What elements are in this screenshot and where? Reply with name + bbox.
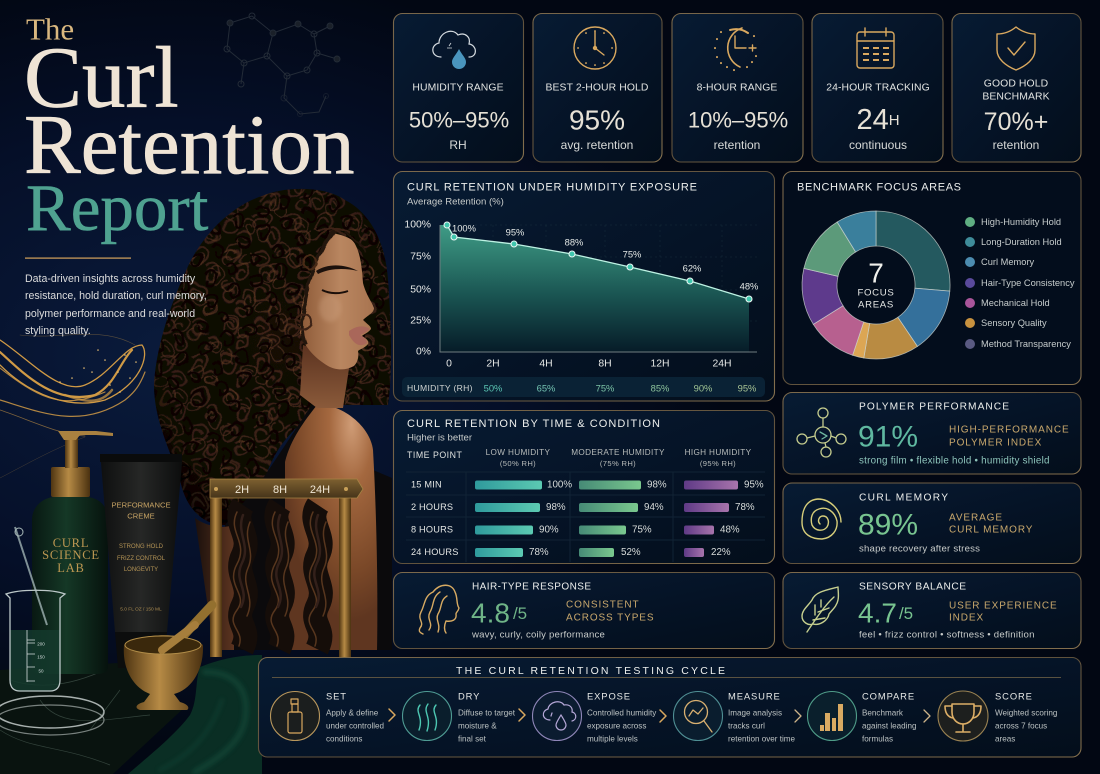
step: score: across 7 focus: [995, 722, 1047, 730]
pump bottle product: CURL: [53, 536, 89, 550]
hair swatch test rack: 8H: [273, 484, 287, 496]
shoulder and arm: [285, 405, 377, 650]
arrow: [660, 710, 666, 722]
row: 2 hours: 98%: [546, 502, 566, 513]
panel: polymer performance: HIGH-PERFORMANCE: [949, 424, 1070, 436]
face: [300, 233, 374, 369]
panel: humidity range: [394, 14, 524, 162]
intro text: polymer performance and real-world: [25, 308, 195, 320]
humidity strip: 65%: [537, 382, 555, 394]
panel: polymer performance: [783, 392, 1081, 474]
panel: retention by time and condition table: CURL RETENTION BY TIME & CONDITION: [407, 418, 660, 430]
y axis labels: 25%: [410, 316, 431, 326]
gold rule: [25, 258, 131, 259]
panel: sensory balance: INDEX: [949, 612, 984, 624]
step: set: Apply & define: [326, 708, 379, 718]
donut center label: [857, 258, 895, 310]
humidity strip: [402, 377, 765, 397]
y axis labels: [404, 220, 431, 358]
rack top bar: [210, 479, 363, 498]
row: 8 hours: 90%: [539, 524, 559, 536]
black tank top: [225, 403, 320, 650]
panel: hair-type response: 4.8/5: [471, 598, 527, 628]
icon: curly hair profile: [419, 585, 459, 634]
x axis labels: 4H: [539, 358, 553, 370]
hair swatch test rack: 24H: [310, 484, 330, 496]
table header: (95% RH): [700, 459, 736, 468]
panel: best 2-hour hold: avg. retention: [561, 138, 633, 152]
step: compare: COMPARE: [862, 690, 915, 702]
green satin cloth: [128, 655, 262, 774]
panel: curl memory: 89%: [858, 508, 918, 542]
icon: leaf: [802, 587, 838, 632]
cheek highlight: [319, 294, 341, 322]
step: score: Weighted scoring: [995, 708, 1057, 718]
panel: testing cycle: [258, 658, 1081, 757]
right side top: [373, 470, 392, 650]
pump bottle product: LAB: [57, 561, 85, 575]
panel: benchmark focus areas: [783, 172, 1081, 384]
step: score: areas: [995, 734, 1015, 744]
panel: curl memory: shape recovery after stress: [859, 544, 980, 554]
panel: curl retention line chart: CURL RETENTION UNDER HUMIDITY EXPOSURE: [407, 182, 697, 194]
y axis labels: 0%: [416, 346, 431, 358]
hair swatch test rack: 2H: [235, 484, 249, 496]
row: 24 hours: 52%: [621, 547, 641, 558]
data points: [444, 222, 752, 302]
panel: 24-hour tracking: [812, 14, 943, 162]
legend: Sensory Quality: [981, 318, 1047, 328]
step: measure: retention over time: [728, 734, 796, 744]
donut center label: AREAS: [858, 300, 894, 310]
row: 15 min: [411, 480, 764, 490]
glass beaker with rod: 50: [38, 668, 44, 674]
panel: curl retention line chart: Average Retention (%): [407, 196, 504, 208]
creme tube product: [100, 454, 182, 668]
data labels: 100%: [452, 222, 476, 234]
row: 2 hours: 94%: [644, 502, 664, 513]
icon: calendar: [857, 28, 894, 68]
panel: hair-type response: [394, 572, 774, 648]
panel: 8-hour range: 8-HOUR RANGE: [697, 82, 777, 94]
row: 24 hours: 24 HOURS: [411, 547, 459, 557]
glass beaker with rod: 200: [37, 642, 45, 646]
step: compare: against leading: [862, 722, 916, 730]
panel: polymer performance: POLYMER INDEX: [949, 438, 1042, 448]
humidity strip: 50%: [484, 382, 502, 394]
arrow: [924, 710, 930, 722]
panel: hair-type response: ACROSS TYPES: [566, 612, 654, 624]
row: 8 hours: 48%: [720, 524, 740, 536]
step: expose: Controlled humidity: [587, 708, 657, 718]
panel: 8-hour range: retention: [714, 138, 760, 152]
icon: shield with check: [997, 27, 1035, 70]
curls framing face: [295, 228, 365, 345]
neck: [300, 345, 350, 408]
row: 24 hours: 22%: [711, 547, 731, 558]
step: expose: exposure across: [587, 722, 646, 730]
row: 15 min: 98%: [647, 480, 667, 490]
step: compare: formulas: [862, 734, 893, 744]
panel: 8-hour range: [672, 14, 803, 162]
table header: LOW HUMIDITY: [486, 448, 551, 457]
row: 2 hours: 2 HOURS: [411, 502, 453, 512]
table header: (50% RH): [500, 459, 536, 468]
marble slab: [0, 663, 185, 774]
brass mortar and pestle: [124, 605, 212, 710]
pump bottle product: [32, 431, 113, 674]
panel: curl memory: AVERAGE: [949, 512, 1003, 524]
legend: Mechanical Hold: [981, 298, 1050, 308]
y axis labels: 75%: [410, 252, 431, 262]
retention line: [447, 225, 749, 299]
panel: 8-hour range: 10%–95%: [688, 108, 788, 132]
humidity strip: 75%: [596, 382, 614, 394]
glass beaker with rod: 150: [37, 654, 45, 660]
pump bottle product: SCIENCE: [42, 548, 100, 562]
panel: sensory balance: 4.7/5: [858, 598, 913, 628]
icon: spiral: [802, 499, 841, 539]
row: 15 min: 15 MIN: [411, 480, 442, 490]
panel: retention by time and condition table: [394, 410, 774, 564]
panel: good hold benchmark: 70%+: [984, 108, 1048, 136]
creme tube product: FRIZZ CONTROL: [117, 556, 166, 562]
row: 15 min: 95%: [744, 480, 764, 490]
panel: polymer performance: strong film • flexible hold • humidity shield: [859, 456, 1050, 466]
panel: 24-hour tracking: continuous: [849, 138, 907, 152]
x axis labels: 8H: [598, 358, 612, 370]
panel: humidity range: RH: [449, 138, 467, 152]
panel: hair-type response: CONSISTENT: [566, 600, 639, 610]
creme tube product: CREME: [127, 512, 155, 520]
step: compare: Benchmark: [862, 708, 904, 718]
panel: sensory balance: feel • frizz control • softness • definition: [859, 630, 1035, 640]
row: 24 hours: 78%: [529, 547, 549, 558]
title: Report: [26, 171, 209, 245]
hanging curl swatches: [233, 505, 327, 649]
satin highlights: [160, 672, 246, 772]
step: compare: [808, 690, 916, 744]
step: dry: Diffuse to target: [458, 708, 516, 718]
panel: testing cycle: THE CURL RETENTION TESTING CYCLE: [456, 665, 725, 677]
panel: best 2-hour hold: [533, 14, 662, 162]
title: The: [26, 12, 74, 46]
arrow: [389, 709, 395, 721]
y axis labels: 100%: [404, 220, 431, 230]
hair mass: [154, 188, 391, 525]
humidity strip: HUMIDITY (RH): [407, 383, 473, 393]
panel: best 2-hour hold: BEST 2-HOUR HOLD: [545, 82, 649, 94]
data labels: [452, 222, 758, 292]
x axis labels: 12H: [650, 358, 670, 370]
panel: retention by time and condition table: Higher is better: [407, 432, 473, 444]
table header: (75% RH): [600, 459, 636, 468]
step: expose: [532, 690, 657, 744]
step: set: SET: [326, 690, 347, 702]
hair swatch test rack: [210, 479, 363, 657]
icon: cloud with drop: [433, 31, 475, 69]
lower back: [195, 518, 234, 650]
panel: curl memory: CURL MEMORY: [949, 524, 1033, 536]
x axis labels: [446, 358, 732, 370]
step: set: [270, 690, 384, 744]
creme tube product: STRONG HOLD: [119, 544, 164, 550]
row: 2 hours: [411, 502, 755, 513]
donut center label: 7: [868, 258, 884, 288]
x axis labels: 24H: [712, 358, 732, 370]
x axis labels: 2H: [486, 358, 500, 370]
donut chart: [802, 211, 950, 359]
panel: good hold benchmark: [952, 14, 1081, 162]
eyebrow: [316, 265, 358, 274]
panel: benchmark focus areas: BENCHMARK FOCUS AREAS: [797, 182, 961, 194]
data labels: 75%: [623, 248, 641, 260]
step: dry: DRY: [458, 690, 480, 702]
glass beaker with rod: [6, 527, 65, 691]
row: 24 hours: [411, 547, 731, 558]
table header: TIME POINT: [407, 450, 462, 460]
panel: hair-type response: wavy, curly, coily performance: [471, 630, 605, 640]
chart axes: [440, 225, 757, 352]
creme tube product: PERFORMANCE: [111, 500, 171, 510]
panel: polymer performance: POLYMER PERFORMANCE: [859, 402, 1009, 412]
legend: [965, 217, 1075, 349]
marble veins: [0, 672, 150, 765]
intro text: resistance, hold duration, curl memory,: [25, 290, 207, 302]
x axis labels: 0: [446, 358, 452, 370]
panel: curl memory: [783, 483, 1081, 564]
panel: good hold benchmark: retention: [993, 138, 1039, 152]
panel: sensory balance: USER EXPERIENCE: [949, 600, 1058, 612]
data labels: 62%: [683, 262, 701, 274]
step: set: conditions: [326, 734, 362, 744]
humidity strip: 90%: [694, 382, 712, 394]
step: score: [938, 690, 1057, 744]
intro text: styling quality.: [25, 325, 91, 337]
panel: 24-hour tracking: 24-HOUR TRACKING: [826, 82, 930, 94]
closed eye: [322, 290, 348, 293]
step: dry: final set: [458, 734, 487, 744]
humidity strip: 85%: [651, 382, 669, 394]
legend: High-Humidity Hold: [981, 217, 1061, 227]
row: 8 hours: 8 HOURS: [411, 524, 453, 534]
arrow: [795, 710, 801, 722]
y axis labels: 50%: [410, 284, 431, 296]
title: [24, 12, 354, 245]
intro text: [25, 273, 207, 337]
panel: hair-type response: HAIR-TYPE RESPONSE: [472, 582, 591, 592]
arrow: [519, 709, 525, 721]
panel: sensory balance: SENSORY BALANCE: [859, 582, 966, 592]
legend: Hair-Type Consistency: [981, 278, 1075, 288]
row: 15 min: 100%: [547, 480, 572, 490]
data labels: 48%: [740, 280, 758, 292]
panel: good hold benchmark: BENCHMARK: [982, 92, 1050, 102]
panel: best 2-hour hold: 95%: [569, 104, 625, 136]
table header: HIGH HUMIDITY: [685, 448, 752, 457]
panel: sensory balance: [783, 572, 1081, 648]
table header: MODERATE HUMIDITY: [571, 448, 665, 457]
panel: 24-hour tracking: 24H: [856, 104, 900, 136]
data labels: 95%: [506, 226, 524, 238]
row: 8 hours: 75%: [632, 524, 652, 536]
panel: good hold benchmark: GOOD HOLD: [984, 78, 1048, 90]
data labels: 88%: [565, 236, 583, 248]
step: measure: tracks curl: [728, 722, 765, 730]
step: measure: [674, 690, 796, 744]
step: dry: [402, 690, 516, 744]
lips: [349, 326, 370, 345]
panel: curl retention line chart: [394, 172, 774, 401]
step: score: SCORE: [995, 690, 1033, 702]
petri dish: [0, 696, 104, 735]
icon: molecule: [797, 408, 846, 457]
creme tube product: LONGEVITY: [124, 567, 158, 573]
panel: curl memory: CURL MEMORY: [859, 492, 948, 504]
step: set: under controlled: [326, 722, 384, 730]
title: Retention: [24, 98, 354, 192]
icon: dotted clock: [715, 28, 756, 70]
panel: polymer performance: 91%: [858, 420, 918, 454]
step: dry: moisture &: [458, 722, 497, 730]
creme tube product: 5.0 FL OZ / 150 ML: [120, 606, 162, 612]
row: 2 hours: 78%: [735, 502, 755, 513]
panel: humidity range: 50%–95%: [409, 108, 509, 132]
intro text: Data-driven insights across humidity: [25, 273, 196, 285]
donut center label: FOCUS: [857, 288, 895, 298]
icon: clock: [574, 27, 616, 69]
legend: Long-Duration Hold: [981, 237, 1062, 247]
legend: Method Transparency: [981, 339, 1071, 349]
legend: Curl Memory: [981, 257, 1035, 267]
row: 8 hours: [411, 524, 740, 536]
model portrait: [140, 180, 395, 650]
step: expose: multiple levels: [587, 734, 638, 744]
step: expose: EXPOSE: [587, 690, 631, 702]
step: measure: MEASURE: [728, 690, 781, 702]
rack posts: [210, 497, 222, 657]
table header: [407, 448, 752, 468]
panel: humidity range: HUMIDITY RANGE: [412, 82, 504, 94]
retention area: [440, 225, 749, 352]
title: Curl: [24, 28, 179, 126]
decorative molecule diagram: [224, 13, 340, 116]
humidity strip: 95%: [738, 382, 756, 394]
step: measure: Image analysis: [728, 708, 782, 718]
gold hair swirl: [0, 334, 145, 478]
